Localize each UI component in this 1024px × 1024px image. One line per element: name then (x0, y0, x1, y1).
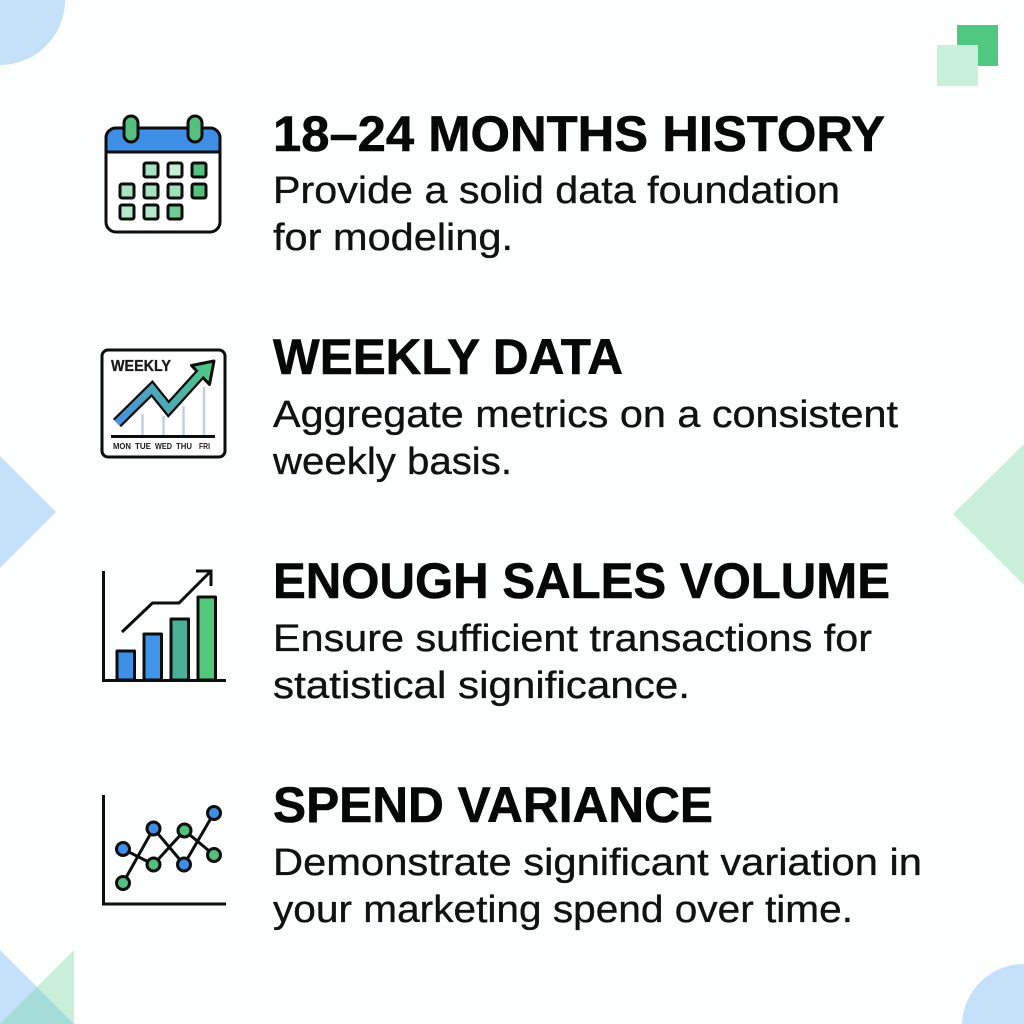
text: description 3: Ensure sufficient transactions for (273, 618, 872, 660)
text: description 3: statistical significance. (273, 665, 690, 707)
text: description 2: weekly basis. (272, 441, 512, 483)
icon: weekly chart: TUE (135, 442, 152, 451)
icon: weekly chart: FRI (199, 442, 210, 451)
decoration: bottom-left triangles (0, 950, 74, 1024)
icon: weekly chart: THU (176, 442, 192, 451)
icon: rising bar chart (104, 571, 226, 680)
decoration: left diamond (0, 456, 56, 568)
text: description 2: Aggregate metrics on a consistent (273, 394, 898, 436)
heading: 18–24 months history: 18–24 MONTHS HISTORY (273, 105, 885, 162)
item 3: enough sales volume (104, 552, 890, 707)
decoration: right diamond (953, 444, 1024, 585)
icon: weekly chart: WED (155, 442, 172, 451)
text: description 4: your marketing spend over time. (273, 889, 853, 931)
decoration: top-left circle (0, 0, 65, 65)
text: description 1: for modeling. (273, 217, 513, 259)
heading: spend variance: SPEND VARIANCE (273, 776, 713, 833)
text: description 1: Provide a solid data foundation (273, 170, 840, 212)
icon: crossing line chart (104, 795, 226, 904)
icon: weekly chart: WEEKLY (111, 358, 172, 375)
icon: weekly chart (102, 350, 225, 457)
heading: enough sales volume: ENOUGH SALES VOLUME (273, 552, 890, 609)
icon: weekly chart: MON (113, 442, 131, 451)
decoration: top-right squares (937, 25, 998, 86)
icon: calendar (106, 116, 220, 232)
item 4: spend variance (104, 776, 922, 931)
item 2: weekly data (102, 328, 898, 483)
text: description 4: Demonstrate significant variation in (273, 842, 922, 884)
heading: weekly data: WEEKLY DATA (273, 328, 623, 385)
item 1: 18–24 months history (106, 105, 885, 259)
decoration: bottom-right circle (962, 964, 1024, 1024)
